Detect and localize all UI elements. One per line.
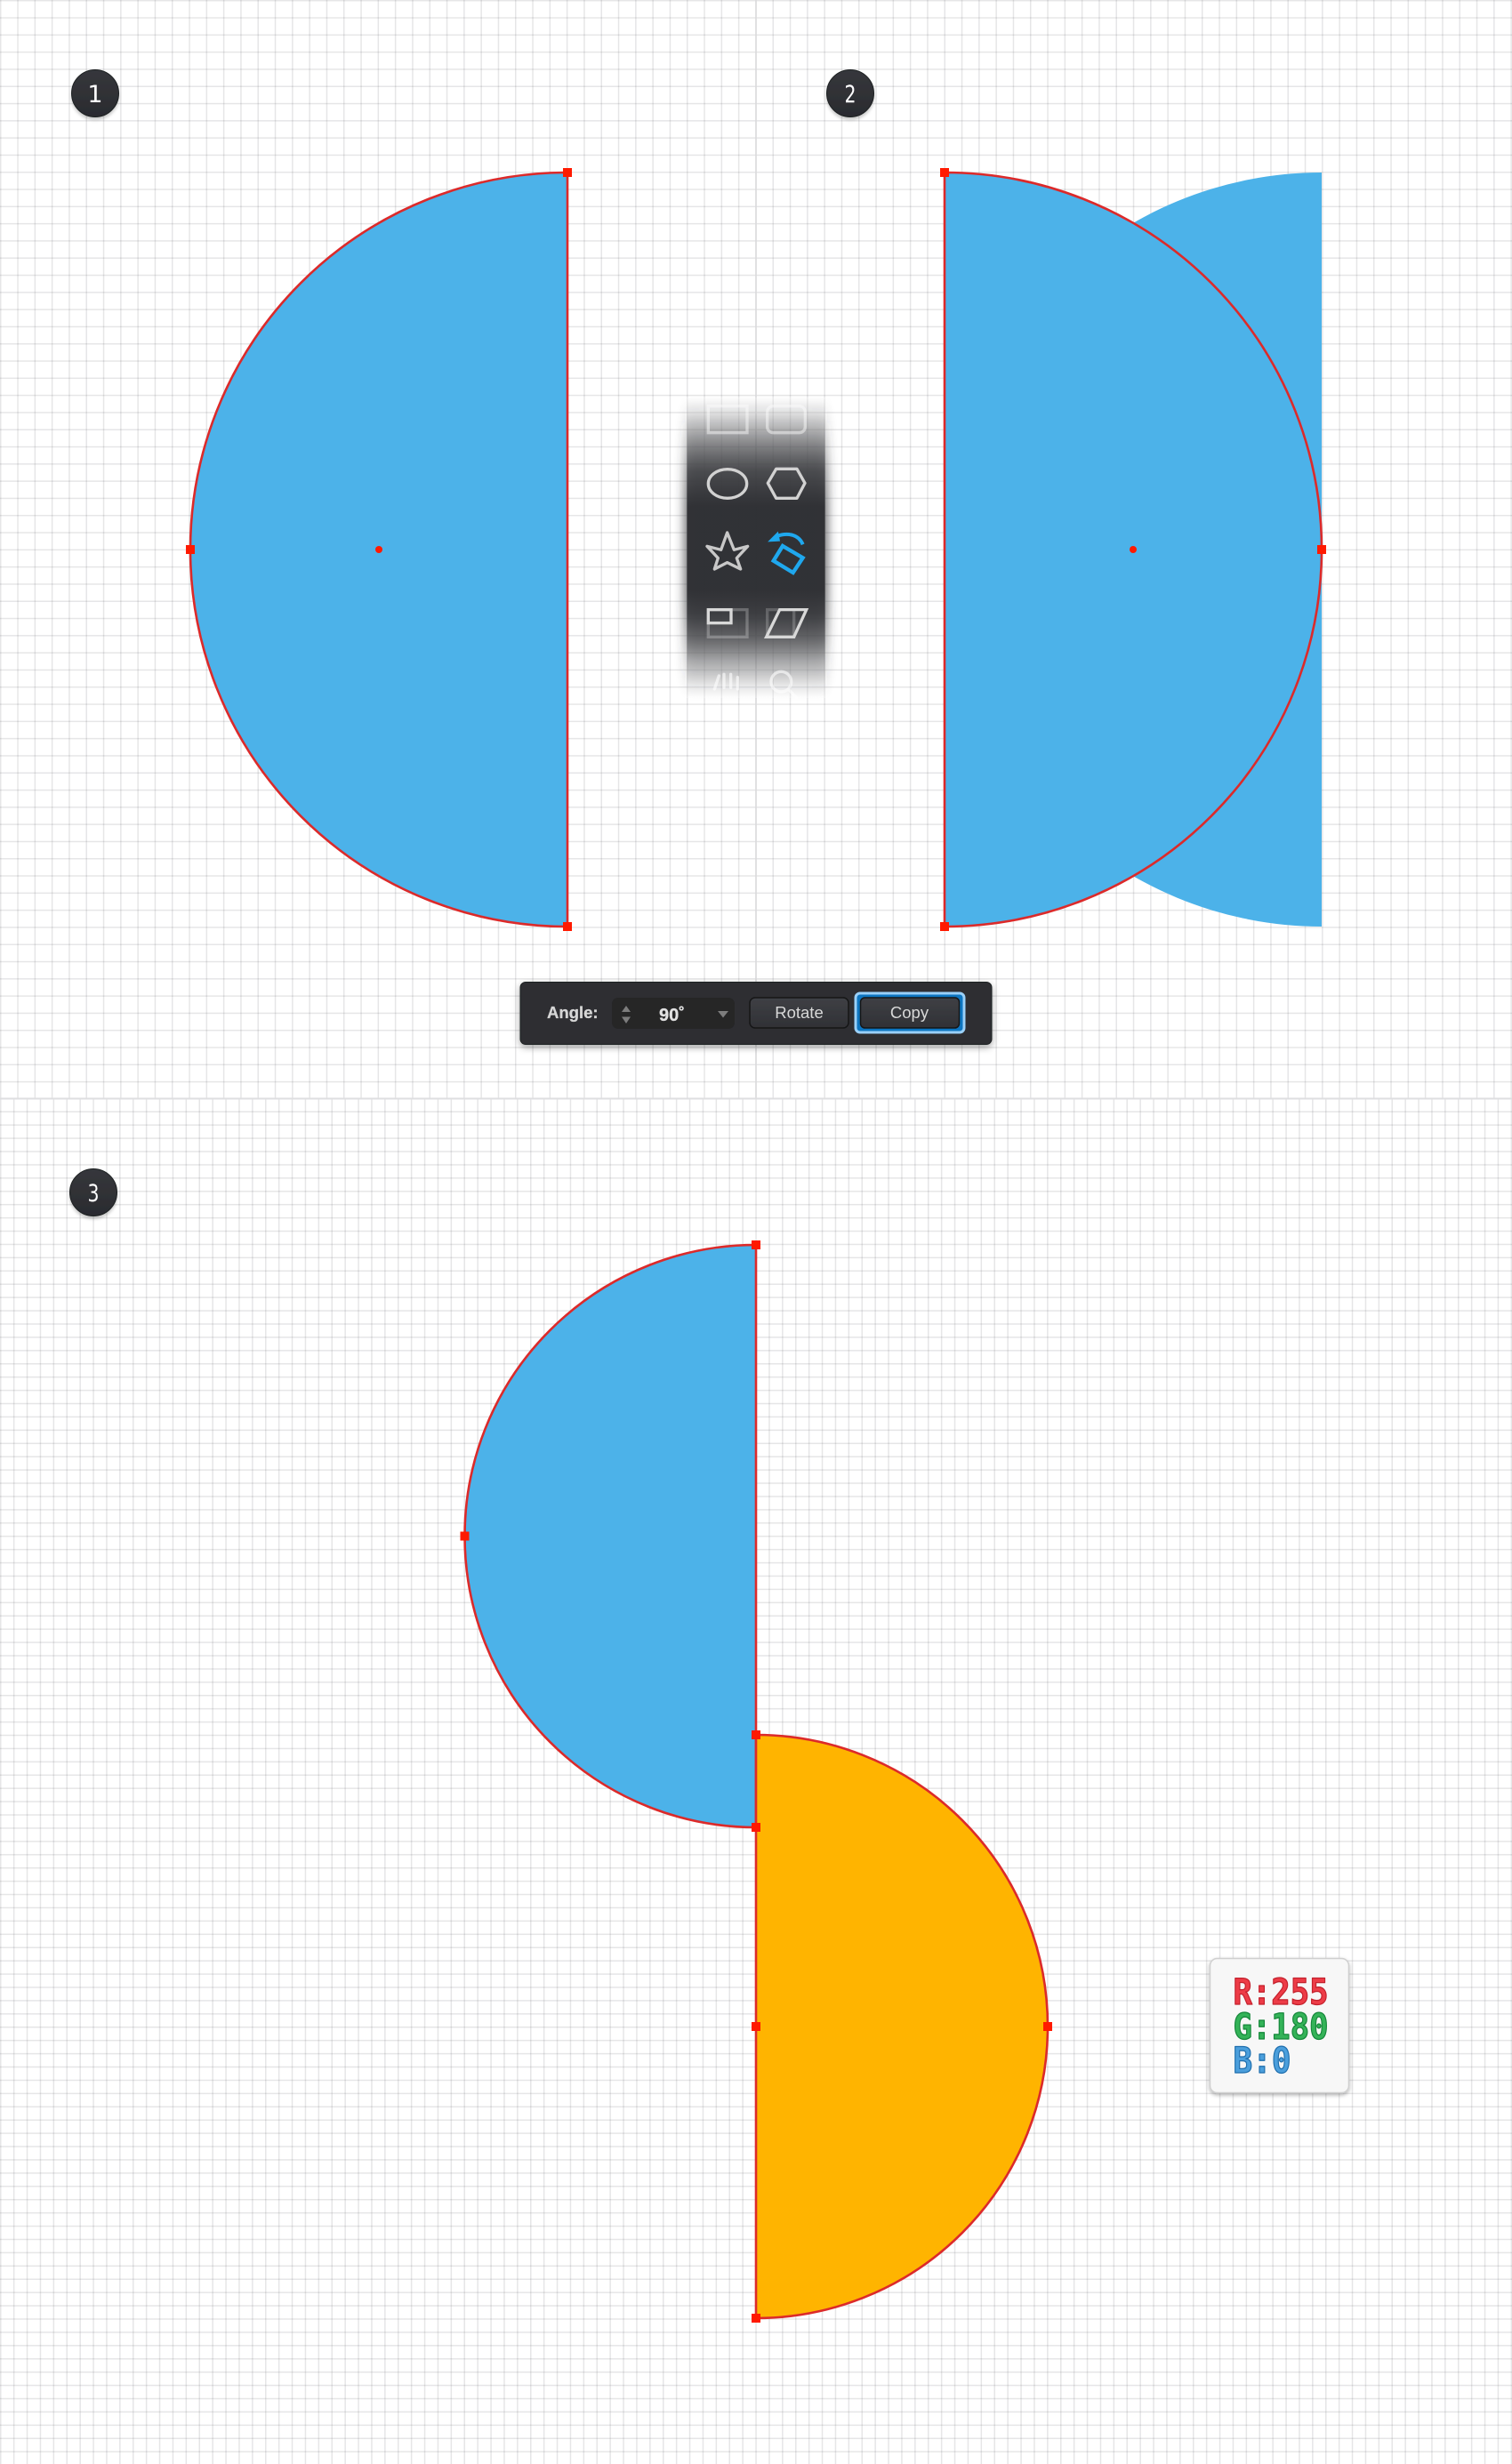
copy button with focus ring: Copy — [890, 1003, 929, 1022]
copy button with focus ring — [856, 993, 964, 1032]
angle input field: 90˚ — [659, 1005, 685, 1025]
step badge 2 — [827, 69, 873, 117]
grid background: top panel — [0, 0, 1512, 1098]
step 3: blue semicircle with anchor points — [461, 1240, 760, 1827]
step badge 1: 1 — [87, 81, 103, 108]
icon: hand tool, faded — [714, 674, 737, 689]
icon: ellipse tool — [708, 470, 747, 498]
icon: scale tool — [708, 610, 747, 637]
icon: rectangle tool — [708, 406, 747, 433]
red value: R:255 — [1233, 1972, 1329, 2013]
green value: G:180 — [1233, 2007, 1329, 2048]
icon: rotate tool, active — [768, 532, 803, 573]
icon: zoom tool, faded — [771, 671, 798, 699]
rotate button — [750, 998, 848, 1028]
icon: polygon tool — [768, 469, 805, 498]
step 2: rotated copy behind, blue semicircle — [945, 173, 1322, 927]
tool panel strip with icons — [685, 397, 827, 699]
grid background: bottom panel — [0, 1098, 1512, 2464]
step badge 2: 2 — [845, 81, 856, 108]
label: angle: Angle: — [547, 1003, 599, 1022]
step 3: orange semicircle with anchor points — [752, 1730, 1052, 2323]
angle input field — [612, 998, 735, 1029]
step badge 3: 3 — [87, 1180, 100, 1208]
icon: star tool — [707, 533, 748, 569]
rotate dialog — [520, 982, 992, 1044]
icon: shear tool — [767, 610, 807, 637]
icon: rounded rectangle tool — [768, 406, 805, 433]
step 1: blue semicircle with anchor points — [186, 168, 572, 931]
rotate button: Rotate — [775, 1003, 824, 1022]
colour value card — [1210, 1958, 1348, 2093]
step badge 3 — [69, 1168, 117, 1216]
step badge 1 — [71, 69, 119, 117]
blue value: B:0 — [1233, 2041, 1291, 2082]
step 2: selected blue semicircle with anchor points — [940, 168, 1326, 931]
